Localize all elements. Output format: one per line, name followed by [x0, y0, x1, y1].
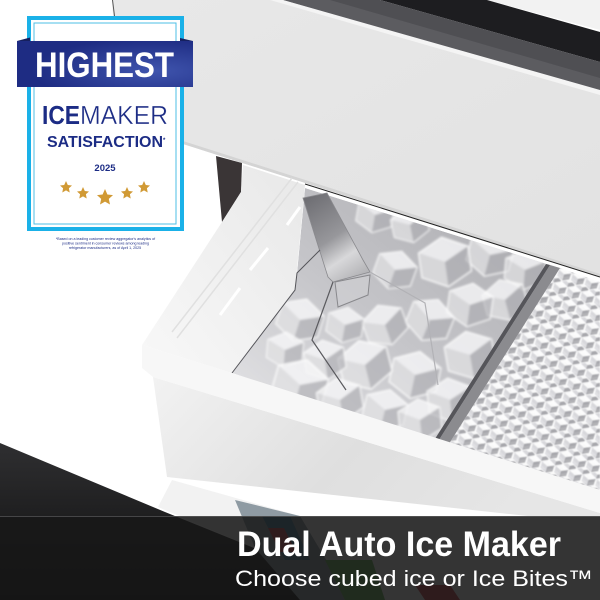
drawer left wall	[142, 165, 305, 373]
asterisk: *	[163, 138, 166, 144]
bin divider	[437, 265, 560, 447]
dark side strip behind drawer	[216, 156, 242, 222]
lower black panel	[0, 443, 383, 600]
wall rails	[172, 178, 300, 338]
ice scoop	[303, 193, 438, 390]
caption bar	[0, 516, 600, 600]
category title	[42, 100, 168, 130]
year: 2025	[94, 163, 116, 174]
bin inner edge	[232, 250, 320, 373]
banner	[17, 41, 193, 87]
fine print: *Based on a leading customer review aggregator's analytics of	[56, 237, 155, 241]
caption subheading: Choose cubed ice or Ice Bites™	[235, 566, 593, 591]
banner fold left	[17, 38, 30, 41]
banner fold right	[180, 38, 193, 41]
category title: MAKER	[80, 100, 168, 130]
shadow under door	[305, 184, 600, 277]
badge frame	[29, 18, 182, 229]
satisfaction label: SATISFACTION	[47, 134, 163, 151]
cubed ice bin	[232, 188, 550, 443]
banner heading: HIGHEST	[35, 46, 174, 85]
drawer front face	[153, 377, 600, 520]
fine print: positive sentiment in consumer reviews among leading	[62, 242, 149, 246]
ice drawer	[142, 165, 600, 520]
caption heading: Dual Auto Ice Maker	[237, 525, 561, 564]
ice bites bin	[450, 268, 600, 490]
five gold stars	[60, 181, 150, 204]
fine print	[56, 237, 155, 250]
refrigerator upper section	[112, 0, 600, 277]
award badge	[17, 18, 193, 250]
category title: ICE	[42, 100, 80, 130]
fine print: refrigerator manufacturers, as of April 1, 2025	[69, 246, 141, 250]
lower drawer contents	[158, 480, 460, 600]
drawer front rim	[142, 345, 600, 513]
